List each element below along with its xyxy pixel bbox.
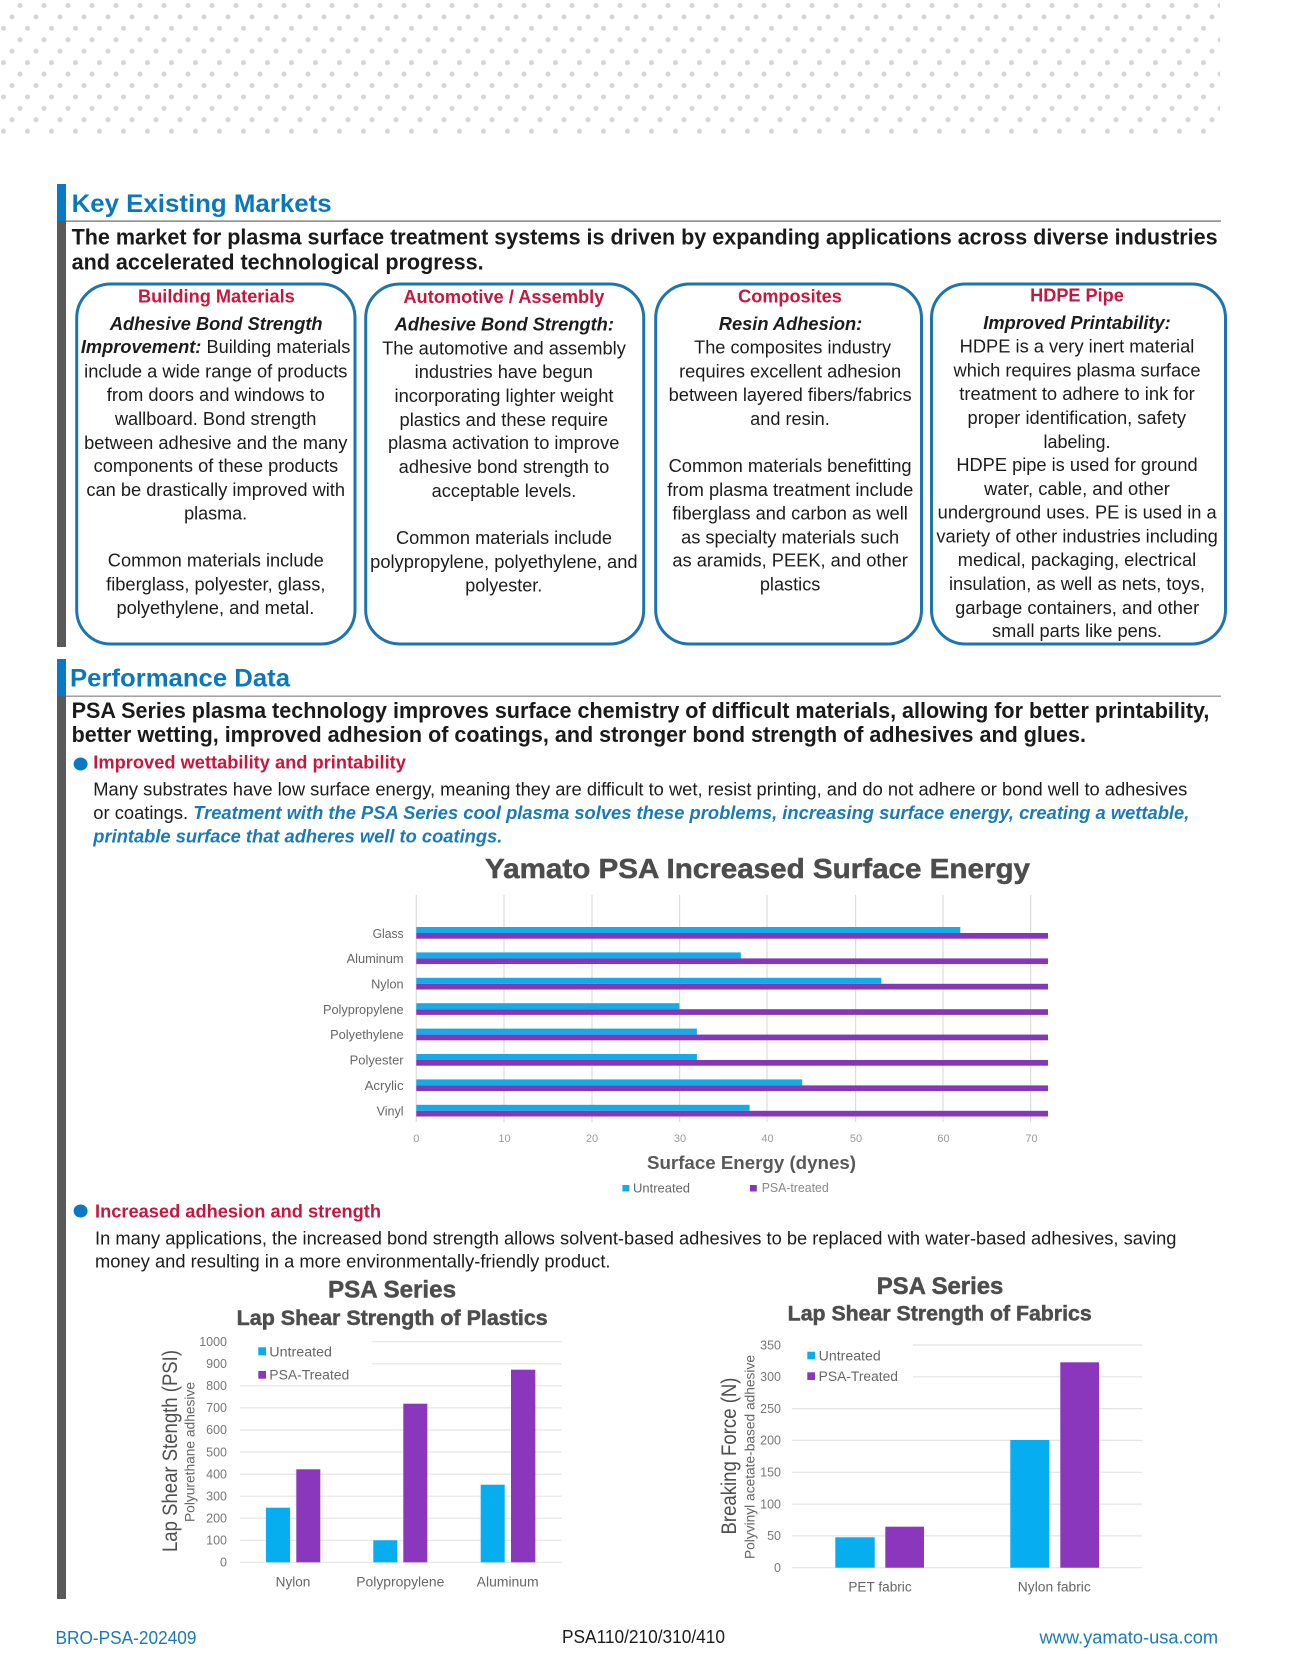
panel: composites: as specialty materials such — [681, 528, 899, 548]
heading: performance data: Performance Data — [70, 665, 291, 693]
intro text: The market for plasma surface treatment systems is driven by expanding applications across diverse industries — [72, 224, 1218, 249]
panel: building materials: wallboard. Bond strength — [114, 409, 316, 429]
category labels: Nylon fabric — [1018, 1580, 1091, 1594]
paragraph: adhesion: In many applications, the increased bond strength allows solvent-based adhesives to be replaced with water-based adhesives, saving — [95, 1228, 1176, 1248]
panel: automotive / assembly: Automotive / Assembly — [403, 287, 604, 307]
value axis ticks: 10 — [498, 1133, 511, 1145]
panel: hdpe pipe: proper identification, safety — [968, 408, 1186, 428]
paragraph: adhesion — [95, 1228, 1176, 1271]
website: www.yamato-usa.com — [1038, 1628, 1218, 1648]
value axis ticks — [760, 1338, 781, 1575]
value axis ticks: 100 — [206, 1534, 227, 1548]
category labels: Aluminum — [347, 952, 404, 966]
value axis ticks: 1000 — [199, 1335, 227, 1349]
panel: automotive / assembly: acceptable levels. — [432, 481, 576, 501]
panel: hdpe pipe: variety of other industries including — [936, 527, 1218, 547]
chart: lap shear strength of fabrics: Lap Shear Strength of Fabrics — [788, 1302, 1092, 1326]
y axis subtitle: Polyurethane adhesive — [182, 1382, 197, 1522]
category labels: Polypropylene — [356, 1574, 444, 1590]
panel: hdpe pipe: garbage containers, and other — [955, 598, 1199, 618]
value axis ticks: 300 — [206, 1490, 227, 1504]
untreated bars — [266, 1485, 505, 1562]
panel: composites: Resin Adhesion: — [719, 314, 862, 334]
panel: building materials: can be drastically improved with — [86, 480, 345, 500]
value axis ticks: 20 — [586, 1133, 598, 1145]
panel: automotive / assembly: adhesive bond strength to — [399, 457, 609, 477]
panel: building materials: polyethylene, and metal. — [116, 598, 314, 618]
panel: automotive / assembly: Adhesive Bond Strength: — [394, 315, 614, 335]
category labels: Polypropylene — [323, 1003, 404, 1017]
category labels — [323, 927, 404, 1118]
value axis ticks: 0 — [413, 1133, 419, 1145]
paragraph: adhesion: money and resulting in a more environmentally-friendly product. — [95, 1251, 610, 1271]
series: untreated bars — [416, 927, 960, 1111]
category labels — [848, 1580, 1091, 1594]
y axis title: Breaking Force (N) — [718, 1378, 741, 1534]
legend: PSA-Treated — [819, 1369, 898, 1384]
panel: composites: fiberglass and carbon as well — [672, 504, 908, 524]
panel: hdpe pipe: small parts like pens. — [992, 621, 1162, 641]
panel: composites: The composites industry — [694, 338, 891, 358]
panel: composites: and resin. — [750, 409, 830, 429]
value axis ticks: 250 — [760, 1402, 781, 1416]
value axis ticks: 60 — [937, 1133, 950, 1145]
panel: hdpe pipe: labeling. — [1044, 432, 1110, 452]
value axis ticks: 0 — [220, 1556, 227, 1570]
paragraph: wettability: Many substrates have low surface energy, meaning they are difficult to wet, resist printing, and do not adhere or bond well to adhesives — [93, 779, 1187, 799]
panel: hdpe pipe: treatment to adhere to ink for — [959, 384, 1195, 404]
y axis subtitle: Polyvinyl acetate-based adhesive — [742, 1355, 757, 1559]
panel: hdpe pipe: insulation, as well as nets, toys, — [949, 574, 1205, 594]
footer — [56, 1627, 1218, 1648]
panel: hdpe pipe: medical, packaging, electrical — [958, 550, 1196, 570]
panel: building materials — [77, 284, 355, 644]
chart: lap shear strength of plastics — [159, 1276, 562, 1590]
intro text: and accelerated technological progress. — [72, 249, 484, 274]
value axis ticks: 700 — [206, 1401, 227, 1415]
value axis ticks: 200 — [760, 1434, 781, 1448]
chart: lap shear strength of fabrics: PSA Series — [877, 1273, 1003, 1300]
value axis ticks: 50 — [767, 1529, 781, 1543]
panel: composites — [656, 284, 922, 644]
chart: lap shear strength of plastics: PSA Series — [328, 1276, 456, 1304]
category labels: Acrylic — [365, 1079, 404, 1093]
category labels: PET fabric — [848, 1580, 912, 1594]
intro text: better wetting, improved adhesion of coatings, and stronger bond strength of adhesives and glues. — [72, 722, 1086, 747]
panel: automotive / assembly — [366, 284, 644, 644]
intro text — [72, 224, 1218, 274]
panel: building materials: Building Materials — [138, 287, 295, 307]
section side bar — [57, 184, 66, 647]
category labels: Aluminum — [477, 1574, 539, 1590]
category labels: Nylon — [371, 977, 404, 991]
dotted header pattern — [0, 0, 1220, 134]
heading: key existing markets: Key Existing Markets — [72, 190, 332, 218]
category labels: Polyester — [350, 1054, 404, 1068]
panel: composites: Composites — [738, 286, 842, 306]
value axis ticks: 500 — [206, 1445, 227, 1459]
legend: Untreated — [633, 1180, 690, 1196]
panel: automotive / assembly: industries have begun — [415, 362, 593, 382]
value axis ticks: 200 — [206, 1512, 227, 1526]
panel: building materials: include a wide range of products — [84, 362, 347, 382]
panel: automotive / assembly: polypropylene, polyethylene, and — [370, 552, 638, 572]
value axis ticks: 900 — [206, 1357, 227, 1371]
legend — [807, 1348, 898, 1384]
chart: surface energy — [323, 853, 1048, 1196]
intro text: PSA Series plasma technology improves surface chemistry of difficult materials, allowing for better printability, — [72, 698, 1209, 723]
panel: automotive / assembly: Common materials include — [396, 528, 612, 548]
panel: hdpe pipe: which requires plasma surface — [952, 361, 1200, 381]
category labels — [276, 1574, 539, 1590]
panel: building materials: plasma. — [184, 504, 247, 524]
value axis ticks — [413, 1133, 1038, 1145]
y axis title: Lap Shear Stength (PSI) — [159, 1350, 182, 1552]
value axis ticks: 100 — [760, 1497, 781, 1511]
section side bar — [57, 659, 66, 1599]
value axis ticks: 70 — [1025, 1133, 1038, 1145]
chart: lap shear strength of plastics: Lap Shear Strength of Plastics — [237, 1307, 548, 1330]
psa-treated bars — [296, 1370, 535, 1562]
panel: hdpe pipe: HDPE pipe is used for ground — [956, 455, 1198, 475]
value axis ticks: 350 — [760, 1338, 781, 1352]
axis title: Surface Energy (dynes) — [647, 1153, 856, 1173]
panel: automotive / assembly: The automotive and assembly — [382, 339, 626, 359]
value axis ticks: 400 — [206, 1467, 227, 1481]
panel: building materials: from doors and windows to — [107, 385, 325, 405]
paragraph: wettability: printable surface that adheres well to coatings. — [92, 826, 502, 846]
panel: hdpe pipe: Improved Printability: — [983, 313, 1171, 333]
legend: Untreated — [819, 1348, 881, 1364]
panel: building materials: components of these products — [94, 456, 338, 476]
paragraph: wettability: or coatings. Treatment with the PSA Series cool plasma solves these problems, increasing surface energy, creating a wettable, — [93, 803, 1189, 823]
legend — [622, 1180, 829, 1196]
value axis ticks: 50 — [850, 1133, 862, 1145]
chart: lap shear strength of fabrics — [718, 1273, 1142, 1594]
panel: building materials: fiberglass, polyester, glass, — [106, 575, 325, 595]
value axis ticks: 150 — [760, 1466, 781, 1480]
panel: hdpe pipe: water, cable, and other — [983, 479, 1170, 499]
panel: building materials: between adhesive and the many — [84, 433, 347, 453]
category labels: Nylon — [276, 1574, 310, 1590]
value axis ticks: 40 — [761, 1133, 774, 1145]
chart: surface energy: Yamato PSA Increased Surface Energy — [485, 853, 1030, 884]
panel: automotive / assembly: plasma activation to improve — [388, 433, 619, 453]
panel: composites: requires excellent adhesion — [679, 362, 901, 382]
model numbers: PSA110/210/310/410 — [562, 1627, 725, 1647]
bullet heading: increased adhesion and strength: Increased adhesion and strength — [95, 1201, 381, 1221]
category labels: Polyethylene — [330, 1028, 404, 1042]
panel: building materials: Adhesive Bond Strength — [109, 314, 323, 334]
category labels: Glass — [373, 927, 404, 941]
panel: automotive / assembly: incorporating lighter weight — [394, 386, 614, 406]
panel: hdpe pipe: underground uses. PE is used in a — [938, 503, 1218, 523]
panel: building materials: Improvement: Building materials — [81, 337, 350, 357]
panel: composites: Common materials benefitting — [669, 456, 912, 476]
legend — [258, 1344, 349, 1382]
section: key existing markets — [57, 184, 1226, 647]
value axis ticks: 300 — [760, 1370, 781, 1384]
value axis ticks — [199, 1335, 227, 1570]
panel: building materials: Common materials include — [108, 551, 324, 571]
intro text — [72, 698, 1209, 747]
value axis ticks: 30 — [674, 1133, 686, 1145]
legend: PSA-treated — [762, 1181, 829, 1195]
panel: composites: plastics — [760, 575, 820, 595]
legend: Untreated — [269, 1344, 332, 1360]
panel: hdpe pipe: HDPE Pipe — [1030, 286, 1124, 306]
paragraph: wettability — [92, 779, 1189, 846]
value axis ticks: 0 — [774, 1561, 781, 1575]
panel: composites: between layered fibers/fabrics — [669, 385, 912, 405]
section: performance data — [57, 659, 1221, 1599]
bullet heading: improved wettability and printability: Improved wettability and printability — [93, 752, 406, 772]
panel: automotive / assembly: polyester. — [465, 576, 542, 596]
untreated bars — [835, 1440, 1049, 1568]
document code: BRO-PSA-202409 — [56, 1628, 196, 1648]
panel: composites: as aramids, PEEK, and other — [672, 551, 908, 571]
legend: PSA-Treated — [269, 1368, 349, 1382]
series: psa-treated bars — [416, 933, 1048, 1116]
panel: composites: from plasma treatment include — [667, 480, 913, 500]
panel: hdpe pipe: HDPE is a very inert material — [960, 337, 1194, 357]
value axis ticks: 800 — [206, 1379, 227, 1393]
category labels: Vinyl — [377, 1104, 404, 1118]
value axis ticks: 600 — [206, 1423, 227, 1437]
panel: hdpe pipe — [932, 284, 1226, 644]
psa-treated bars — [885, 1362, 1099, 1568]
panel: automotive / assembly: plastics and these require — [400, 410, 608, 430]
